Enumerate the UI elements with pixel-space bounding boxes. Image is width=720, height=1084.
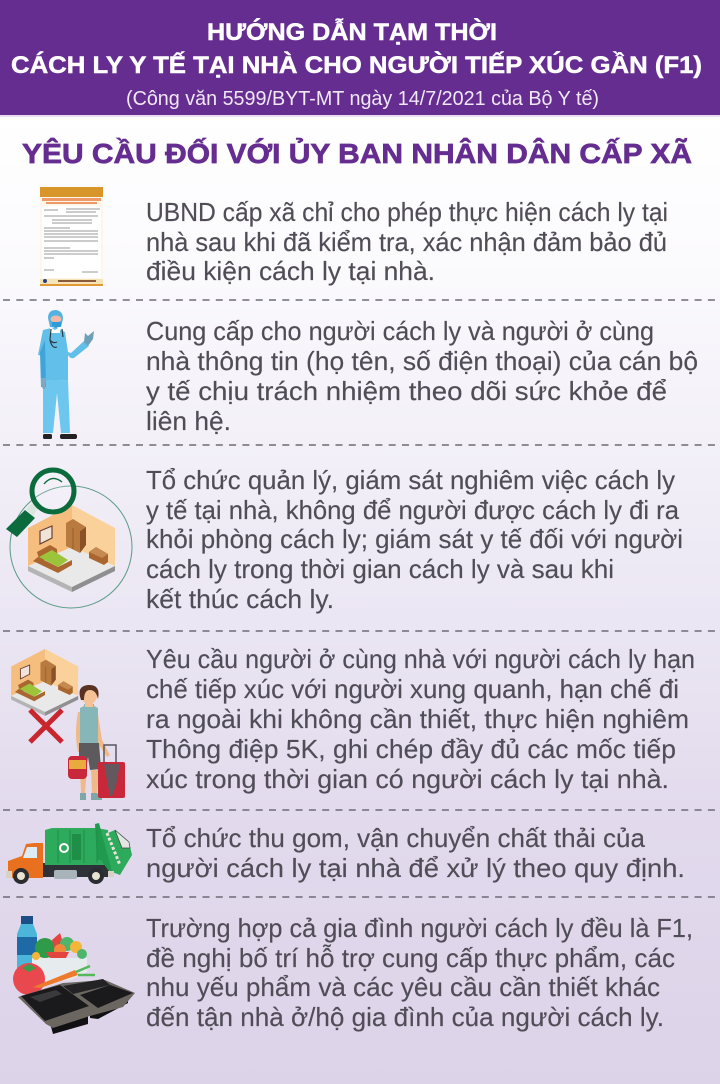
text: block 2: nhà thông tin (họ tên, số điện thoại) của cán bộ	[146, 346, 698, 376]
section heading: YÊU CẦU ĐỐI VỚI ỦY BAN NHÂN DÂN CẤP XÃ	[22, 137, 692, 169]
text: block 2: liên hệ.	[146, 406, 231, 436]
text: block 1: nhà sau khi đã kiểm tra, xác nhận đảm bảo đủ	[146, 227, 667, 257]
title: HƯỚNG DẪN TẠM THỜI	[207, 17, 497, 46]
text: block 2: Cung cấp cho người cách ly và người ở cùng	[146, 316, 654, 346]
title: CÁCH LY Y TẾ TẠI NHÀ CHO NGƯỜI TIẾP XÚC GẦN (F1)	[11, 51, 702, 79]
text: block 3: cách ly trong thời gian cách ly và sau khi	[146, 554, 614, 584]
text: block 1: điều kiện cách ly tại nhà.	[146, 256, 435, 286]
icon: document	[40, 187, 103, 286]
icon: garbage truck	[6, 823, 132, 884]
text: block 2: y tế chịu trách nhiệm theo dõi sức khỏe để	[146, 376, 667, 406]
text: block 3: khỏi phòng cách ly; giám sát y tế đối với người	[146, 524, 683, 554]
text: block 3: kết thúc cách ly.	[146, 584, 334, 614]
text: block 6: đề nghị bố trí hỗ trợ cung cấp thực phẩm, các	[146, 943, 675, 973]
text: block 4: xúc trong thời gian có người cách ly tại nhà.	[146, 764, 669, 794]
text: block 5: Tổ chức thu gom, vận chuyển chất thải của	[146, 823, 646, 853]
text: block 5	[146, 823, 685, 883]
text: block 1	[146, 197, 668, 286]
text: block 6	[146, 913, 693, 1032]
icon: room, red cross and traveller	[11, 649, 125, 800]
subtitle: (Công văn 5599/BYT-MT ngày 14/7/2021 của Bộ Y tế)	[126, 88, 599, 110]
text: block 4: ra ngoài khi không cần thiết, thực hiện nghiêm	[146, 704, 689, 734]
text: block 6: nhu yếu phẩm và các yêu cầu cần thiết khác	[146, 972, 660, 1002]
text: block 4: chế tiếp xúc với người xung quanh, hạn chế đi	[146, 674, 679, 704]
icon: magnifier over room	[6, 470, 132, 608]
text: block 2	[146, 316, 698, 436]
text: block 4: Yêu cầu người ở cùng nhà với người cách ly hạn	[146, 644, 695, 674]
text: block 4	[146, 644, 695, 794]
icon: doctor	[38, 310, 94, 439]
text: block 3	[146, 465, 683, 614]
text: block 4: Thông điệp 5K, ghi chép đầy đủ các mốc tiếp	[146, 734, 676, 764]
text: block 3: y tế tại nhà, không để người được cách ly đi ra	[146, 495, 680, 525]
text: block 1: UBND cấp xã chỉ cho phép thực hiện cách ly tại	[146, 197, 668, 227]
icon: food, water and meal trays	[13, 916, 135, 1034]
dividers	[3, 300, 720, 897]
text: block 6: đến tận nhà ở/hộ gia đình của người cách ly.	[146, 1002, 664, 1032]
text: block 3: Tổ chức quản lý, giám sát nghiêm việc cách ly	[146, 465, 675, 495]
text: block 5: người cách ly tại nhà để xử lý theo quy định.	[146, 853, 685, 883]
text: block 6: Trường hợp cả gia đình người cách ly đều là F1,	[146, 913, 693, 943]
header banner	[0, 0, 720, 117]
title	[11, 17, 702, 79]
